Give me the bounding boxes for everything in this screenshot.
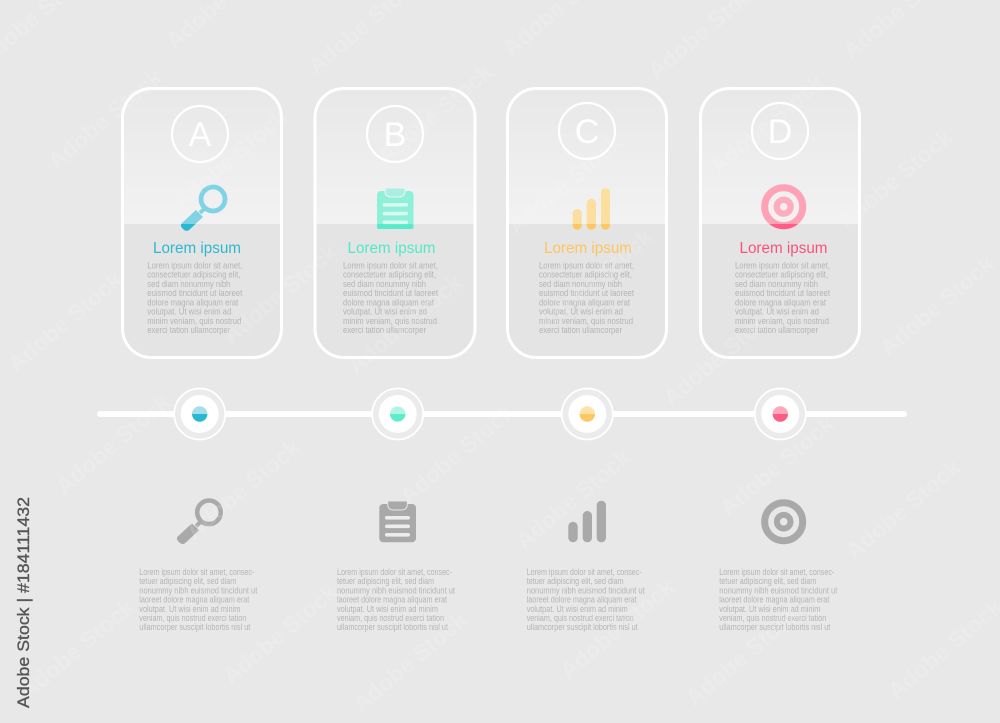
text block A: minim veniam, quis nostrud — [147, 316, 241, 326]
text block C — [539, 260, 634, 335]
lower text block D: Lorem ipsum dolor sit amet, consec- — [719, 567, 834, 577]
icon: grey magnifier — [177, 500, 221, 544]
text block A: volutpat. Ut wisi enim ad — [147, 307, 231, 317]
watermarks: Adobe Stock — [715, 411, 839, 521]
icon: bars — [573, 188, 610, 230]
lower text block B: tetuer adipiscing elit, sed diam — [337, 576, 434, 586]
watermarks: Adobe Stock — [348, 607, 472, 717]
lower text block C: Lorem ipsum dolor sit amet, consec- — [527, 567, 642, 577]
text block A: consectetuer adipiscing elit, — [147, 270, 240, 280]
watermarks: Adobe Stock — [343, 269, 467, 379]
watermarks: Adobe Stock — [168, 104, 292, 214]
watermarks: Adobe Stock — [705, 69, 829, 179]
lower text block B: veniam, quis nostrud exerci tation — [337, 613, 444, 623]
text block C: exerci tation ullamcorper — [539, 325, 622, 335]
lower text block B: ullamcorper suscipit lobortis nisl ut — [337, 622, 448, 632]
letter badge C — [559, 103, 615, 159]
lower text block D: ullamcorper suscipit lobortis nisl ut — [719, 622, 831, 632]
watermarks: Adobe Stock — [875, 251, 999, 361]
text block D: exerci tation ullamcorper — [735, 325, 818, 335]
text block C: consectetuer adipiscing elit, — [539, 270, 632, 280]
lower text block A: tetuer adipiscing elit, sed diam — [139, 576, 236, 586]
lower text block B: nonummy nibh euismod tincidunt ut — [337, 585, 455, 595]
watermarks: Adobe Stock — [218, 239, 342, 349]
timeline — [97, 388, 907, 440]
text block D: consectetuer adipiscing elit, — [735, 270, 828, 280]
letter badge D — [752, 103, 808, 159]
watermarks: Adobe Stock — [51, 389, 175, 499]
watermarks: Adobe Stock — [533, 224, 657, 334]
watermarks: Adobe Stock — [395, 399, 519, 509]
watermarks: Adobe Stock — [181, 434, 305, 544]
letter badge B — [367, 106, 423, 162]
text block A: dolore magna aliquam erat — [147, 298, 239, 308]
text block B: minim veniam, quis nostrud — [343, 316, 437, 326]
text block A: euismod tincidunt ut laoreet — [147, 288, 243, 298]
text block B — [343, 260, 438, 335]
lower text block C: tetuer adipiscing elit, sed diam — [527, 576, 624, 586]
text block A: exerci tation ullamcorper — [147, 325, 230, 335]
watermarks: Adobe Stock — [218, 579, 342, 689]
watermarks: Adobe Stock — [555, 574, 679, 684]
lower text block C: nonummy nibh euismod tincidunt ut — [527, 585, 645, 595]
lower text block B: volutpat. Ut wisi enim ad minim — [337, 604, 438, 614]
lower text block A: veniam, quis nostrud exerci tation — [139, 613, 246, 623]
text block D: euismod tincidunt ut laoreet — [735, 288, 830, 298]
lower text block A: volutpat. Ut wisi enim ad minim — [139, 604, 240, 614]
watermarks: Adobe Stock — [681, 601, 805, 711]
text block C: euismod tincidunt ut laoreet — [539, 288, 634, 298]
lower text block D: volutpat. Ut wisi enim ad minim — [719, 604, 820, 614]
lower text block C: volutpat. Ut wisi enim ad minim — [527, 604, 628, 614]
lower text block B — [337, 567, 455, 632]
text block A: Lorem ipsum dolor sit amet, — [147, 260, 242, 270]
watermarks: Adobe Stock — [503, 129, 627, 239]
panel: card B — [315, 88, 475, 358]
watermarks: Adobe Stock — [511, 444, 635, 554]
lower text block A: laoreet dolore magna aliquam erat — [139, 595, 250, 605]
lower text block C: veniam, quis nostrud exerci tation — [527, 613, 634, 623]
watermarks: Adobe Stock — [43, 64, 167, 174]
text block B: sed diam nonummy nibh — [343, 279, 426, 289]
timeline marker A — [174, 388, 225, 440]
heading D: Lorem ipsum — [740, 240, 828, 257]
lower text block D: nonummy nibh euismod tincidunt ut — [719, 585, 838, 595]
icon: target — [765, 188, 803, 226]
text block D: volutpat. Ut wisi enim ad — [735, 307, 819, 317]
stock id label: Adobe Stock | #184111432 — [14, 497, 33, 708]
timeline marker D — [755, 388, 806, 440]
lower text block A — [139, 567, 258, 632]
watermarks: Adobe Stock — [373, 59, 497, 169]
lower text block A: ullamcorper suscipit lobortis nisl ut — [139, 622, 251, 632]
lower text block C: ullamcorper suscipit lobortis nisl ut — [527, 622, 638, 632]
heading A: Lorem ipsum — [153, 240, 241, 257]
text block C: dolore magna aliquam erat — [539, 298, 630, 308]
lower text block D — [719, 567, 838, 632]
watermarks: Adobe Stock — [3, 267, 127, 377]
text block A: sed diam nonummy nibh — [147, 279, 230, 289]
panel: card C — [507, 88, 667, 358]
icon: grey clipboard — [379, 501, 416, 542]
watermarks: Adobe Stock — [658, 301, 782, 411]
timeline marker C — [562, 388, 613, 440]
letter badge D: D — [768, 113, 792, 151]
text block B: euismod tincidunt ut laoreet — [343, 288, 438, 298]
lower text block D: laoreet dolore magna aliquam erat — [719, 595, 830, 605]
letter badge B: B — [384, 116, 406, 154]
watermarks: Adobe Stock — [833, 124, 957, 234]
text block B: exerci tation ullamcorper — [343, 325, 426, 335]
icon: clipboard — [377, 188, 414, 229]
text block B: dolore magna aliquam erat — [343, 298, 434, 308]
lower text block D: veniam, quis nostrud exerci tation — [719, 613, 826, 623]
icon: magnifier — [181, 187, 225, 231]
letter badge A — [172, 106, 228, 162]
lower text block C: laoreet dolore magna aliquam erat — [527, 595, 637, 605]
text block A — [147, 260, 243, 335]
heading C: Lorem ipsum — [544, 240, 632, 257]
text block B: volutpat. Ut wisi enim ad — [343, 307, 427, 317]
text block D: minim veniam, quis nostrud — [735, 316, 829, 326]
panel: card A — [122, 88, 282, 358]
lower text block C — [527, 567, 645, 632]
icon: grey target — [765, 503, 803, 541]
lower text block A: Lorem ipsum dolor sit amet, consec- — [139, 567, 254, 577]
watermarks: Adobe Stock — [15, 594, 139, 704]
text block D: sed diam nonummy nibh — [735, 279, 818, 289]
lower text block D: tetuer adipiscing elit, sed diam — [719, 576, 816, 586]
timeline marker B — [372, 388, 423, 440]
text block D — [735, 260, 830, 335]
text block C: sed diam nonummy nibh — [539, 279, 622, 289]
text block D: Lorem ipsum dolor sit amet, — [735, 260, 830, 270]
heading B: Lorem ipsum — [348, 240, 436, 257]
lower text block B: Lorem ipsum dolor sit amet, consec- — [337, 567, 452, 577]
text block D: dolore magna aliquam erat — [735, 298, 826, 308]
text block C: minim veniam, quis nostrud — [539, 316, 633, 326]
text block B: Lorem ipsum dolor sit amet, — [343, 260, 438, 270]
text block C: Lorem ipsum dolor sit amet, — [539, 260, 634, 270]
lower text block B: laoreet dolore magna aliquam erat — [337, 595, 447, 605]
letter badge C: C — [575, 113, 599, 151]
letter badge A: A — [189, 116, 212, 154]
icon: grey bars — [568, 501, 606, 542]
lower text block A: nonummy nibh euismod tincidunt ut — [139, 585, 258, 595]
text block B: consectetuer adipiscing elit, — [343, 270, 436, 280]
panel: card D — [700, 88, 860, 358]
text block C: volutpat. Ut wisi enim ad — [539, 307, 623, 317]
watermarks: Adobe Stock — [841, 454, 965, 564]
